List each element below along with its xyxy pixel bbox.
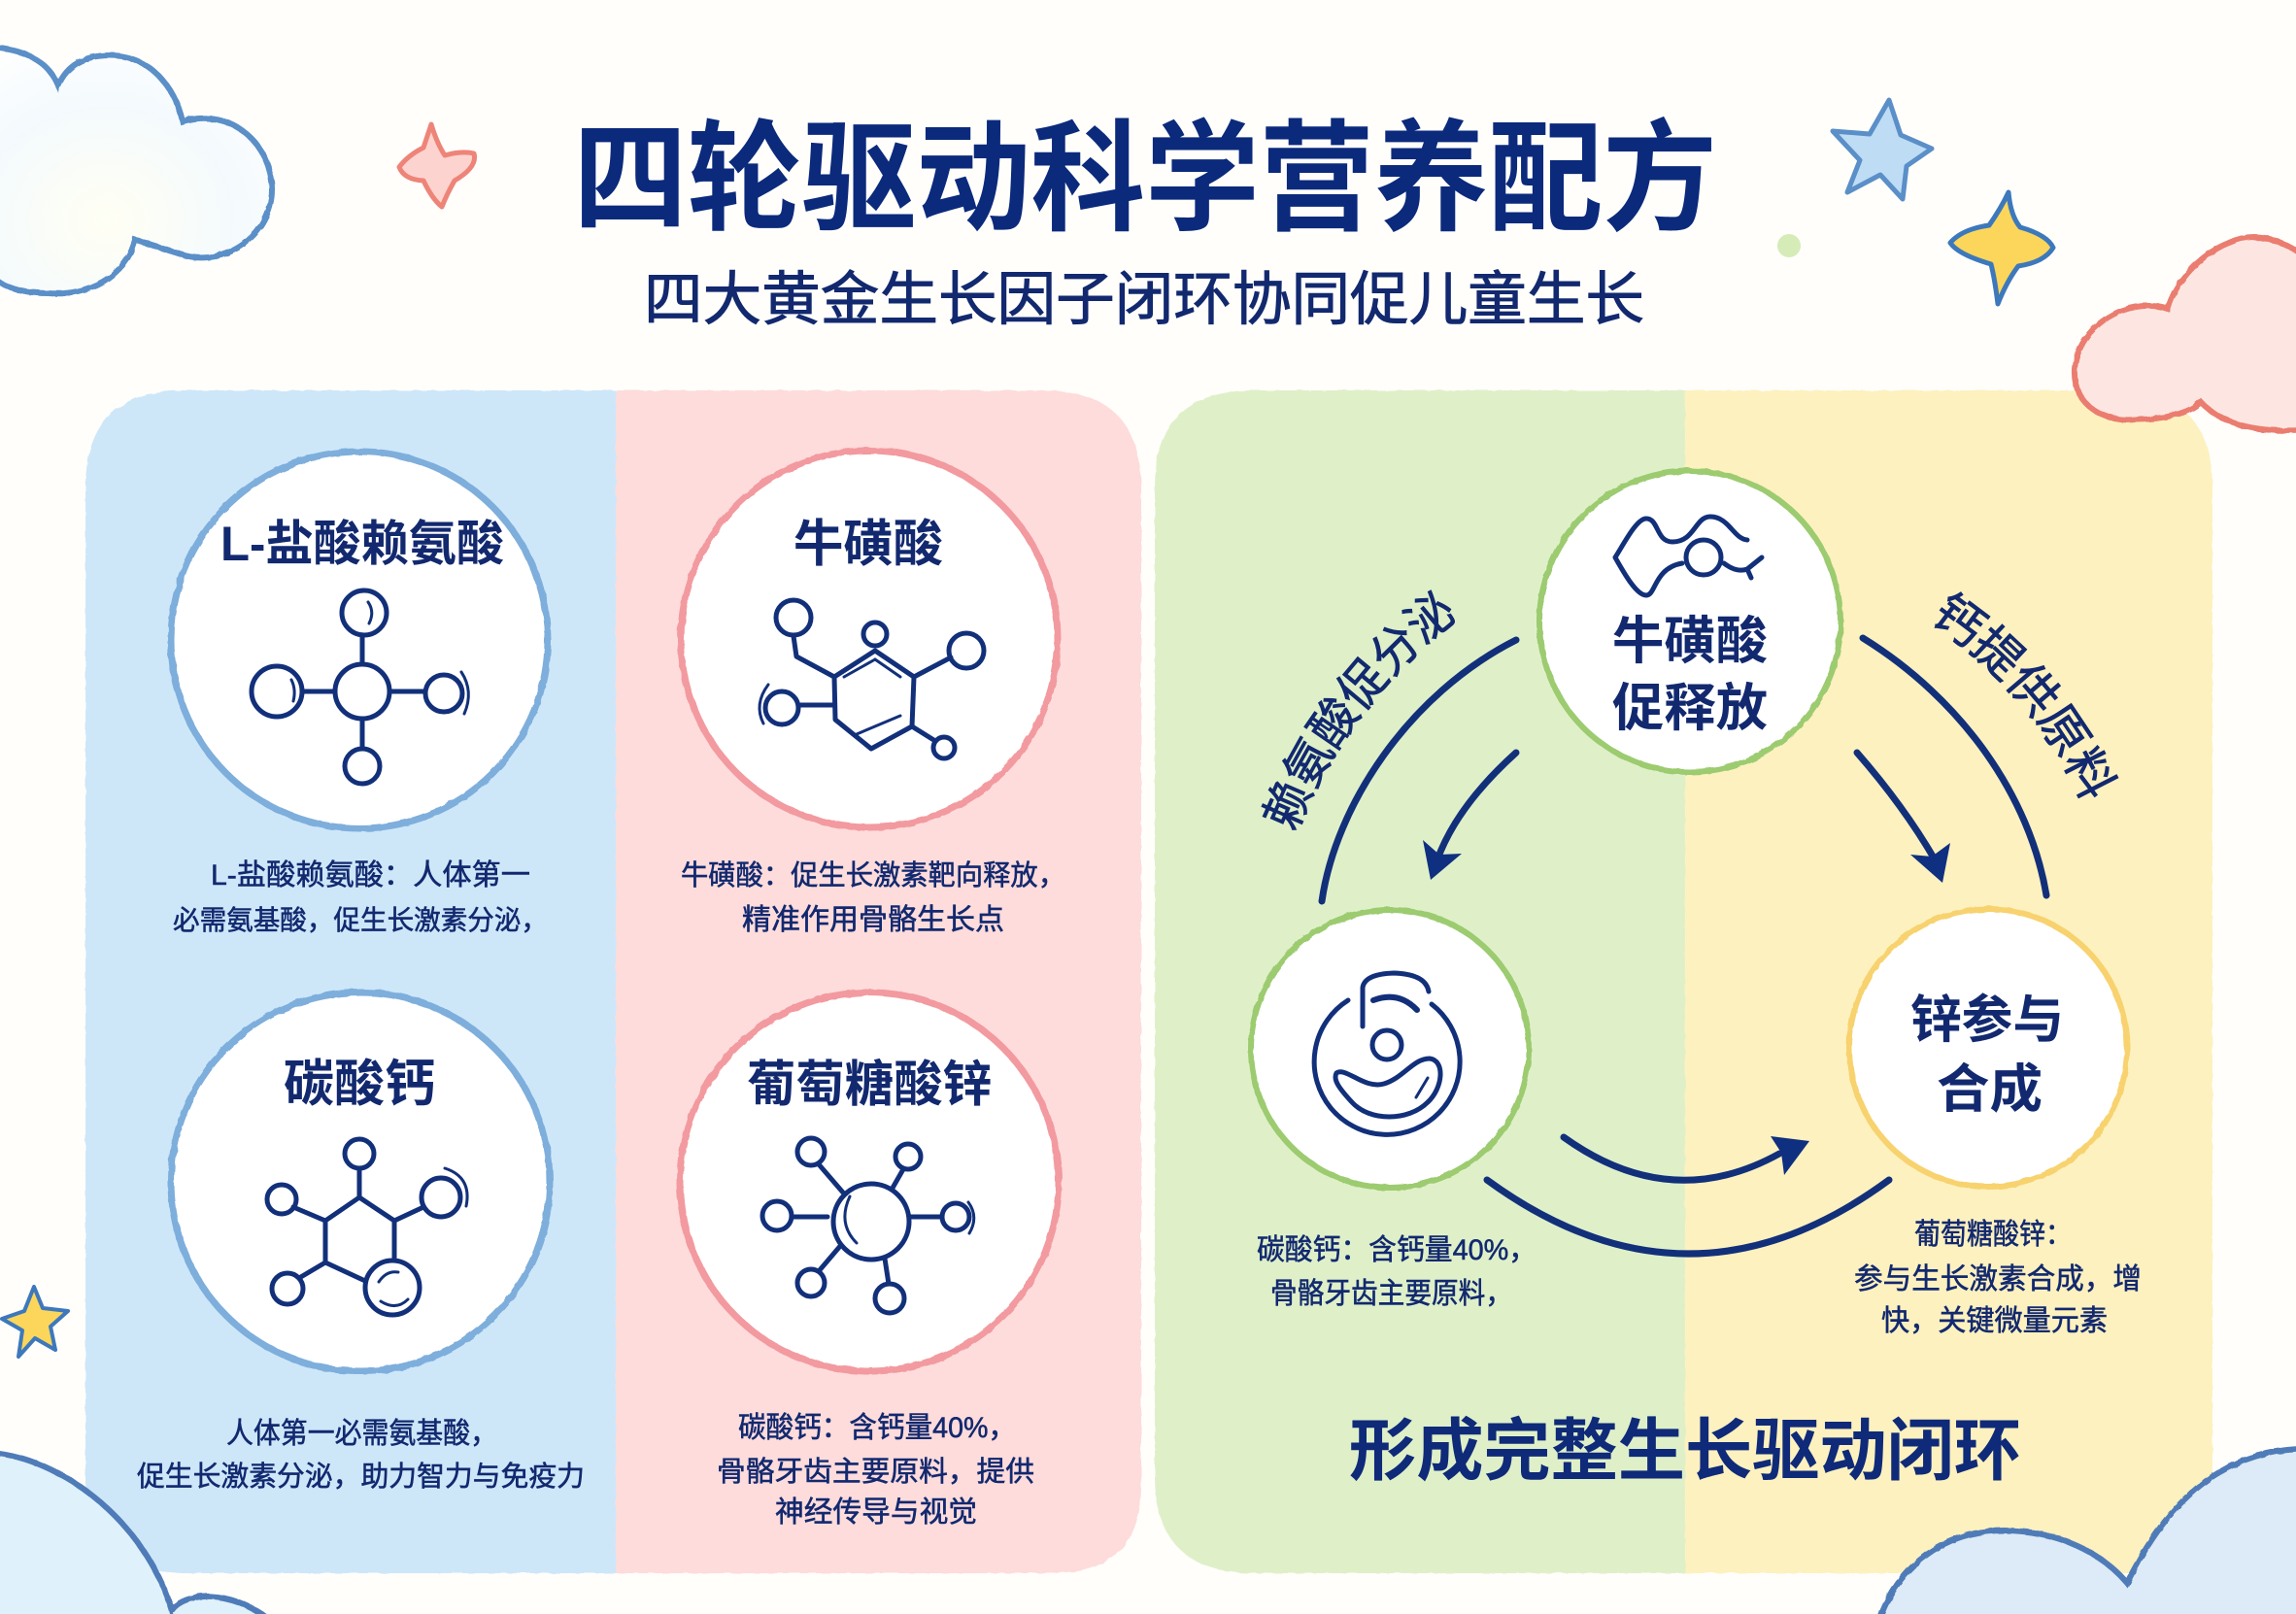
node text xyxy=(1612,613,1768,737)
card: calcium carbonate xyxy=(171,992,550,1371)
cloud: top right xyxy=(2075,237,2296,430)
caption: zinc: 参与生长激素合成，增 xyxy=(1854,1263,2142,1295)
cloud: bottom left xyxy=(0,1453,270,1614)
caption: zinc gluconate: 骨骼牙齿主要原料，提供 xyxy=(717,1456,1034,1488)
caption: taurine: 牛磺酸：促生长激素靶向释放， xyxy=(681,859,1065,891)
title: 四轮驱动科学营养配方 xyxy=(573,113,1717,247)
curved label: lysine: 赖氨酸促分泌 xyxy=(1261,589,1455,830)
caption: L-lysine xyxy=(173,859,548,935)
caption: calcium xyxy=(1257,1234,1536,1310)
icon: green dot xyxy=(1777,234,1801,257)
icon: molecule xyxy=(267,1139,467,1315)
caption: calcium carbonate: 人体第一必需氨基酸， xyxy=(226,1418,497,1450)
node text: 合成 xyxy=(1937,1060,2043,1119)
caption: zinc: 葡萄糖酸锌： xyxy=(1914,1219,2072,1251)
loop conclusion: 形成完整生长驱动闭环 xyxy=(1349,1413,2021,1489)
blue panel half xyxy=(85,390,616,1573)
caption: calcium carbonate xyxy=(137,1418,585,1493)
ring xyxy=(680,992,1059,1371)
arrow: right outer arc xyxy=(1863,638,2046,895)
cloud: top left xyxy=(0,48,272,293)
icon: molecule xyxy=(760,600,984,758)
ring xyxy=(681,451,1058,827)
node ring xyxy=(1849,909,2127,1187)
card: zinc gluconate xyxy=(680,992,1059,1371)
node text xyxy=(1910,992,2064,1119)
node: zinc xyxy=(1849,909,2127,1187)
pink panel half xyxy=(616,390,1141,1573)
caption: taurine xyxy=(681,859,1065,936)
icon: pink star xyxy=(399,124,475,207)
caption: zinc xyxy=(1854,1219,2142,1337)
arrow: right inner xyxy=(1857,753,1950,883)
caption: L-lysine: L-盐酸赖氨酸：人体第一 xyxy=(211,859,530,891)
node text: 牛磺酸 xyxy=(1612,613,1768,670)
subtitle: 四大黄金生长因子闭环协同促儿童生长 xyxy=(644,267,1644,332)
ring xyxy=(171,992,550,1371)
node: calcium xyxy=(1251,910,1529,1188)
node ring xyxy=(1251,910,1529,1188)
arrow: left inner xyxy=(1423,753,1516,880)
caption: L-lysine: 必需氨基酸，促生长激素分泌， xyxy=(173,905,548,935)
panel: growth loop xyxy=(1154,389,2213,1573)
node ring xyxy=(1539,471,1840,772)
card title: 牛磺酸 xyxy=(793,517,943,573)
node text: 锌参与 xyxy=(1910,992,2064,1049)
card title: L-盐酸赖氨酸 xyxy=(220,517,504,571)
node: taurine xyxy=(1539,471,1840,772)
icon: molecule xyxy=(252,590,468,784)
curved label: calcium: 钙提供原料 xyxy=(1935,591,2119,798)
icon: yellow sparkle xyxy=(1950,192,2053,304)
caption: zinc: 快，关键微量元素 xyxy=(1881,1305,2108,1337)
node text: 促释放 xyxy=(1612,680,1768,737)
caption: zinc gluconate: 碳酸钙：含钙量40%， xyxy=(738,1412,1016,1444)
icon: blue star xyxy=(1833,100,1932,199)
arrow: bottom inner xyxy=(1564,1136,1809,1180)
icon: yellow star xyxy=(2,1287,68,1357)
caption: calcium carbonate: 促生长激素分泌，助力智力与免疫力 xyxy=(137,1461,585,1493)
panel: ingredients xyxy=(85,390,1141,1573)
card title: 碳酸钙 xyxy=(284,1057,435,1113)
yellow panel half xyxy=(1685,390,2212,1573)
caption: taurine: 精准作用骨骼生长点 xyxy=(742,904,1004,936)
arrow: bottom outer arc xyxy=(1487,1180,1889,1254)
caption: zinc gluconate xyxy=(717,1412,1034,1529)
card: L-lysine xyxy=(171,452,548,828)
cloud: bottom right xyxy=(1879,1449,2296,1614)
icon: bone cell xyxy=(1314,973,1460,1134)
arrow: left outer arc xyxy=(1322,640,1516,901)
caption: zinc gluconate: 神经传导与视觉 xyxy=(775,1496,977,1529)
green panel half xyxy=(1155,390,1685,1573)
card: taurine xyxy=(681,451,1058,827)
caption: calcium: 碳酸钙：含钙量40%， xyxy=(1257,1234,1536,1266)
icon: molecule xyxy=(762,1138,974,1313)
card title: 葡萄糖酸锌 xyxy=(747,1057,992,1112)
caption: calcium: 骨骼牙齿主要原料， xyxy=(1270,1278,1512,1310)
ring xyxy=(171,452,548,828)
icon: chain molecule xyxy=(1615,517,1762,595)
